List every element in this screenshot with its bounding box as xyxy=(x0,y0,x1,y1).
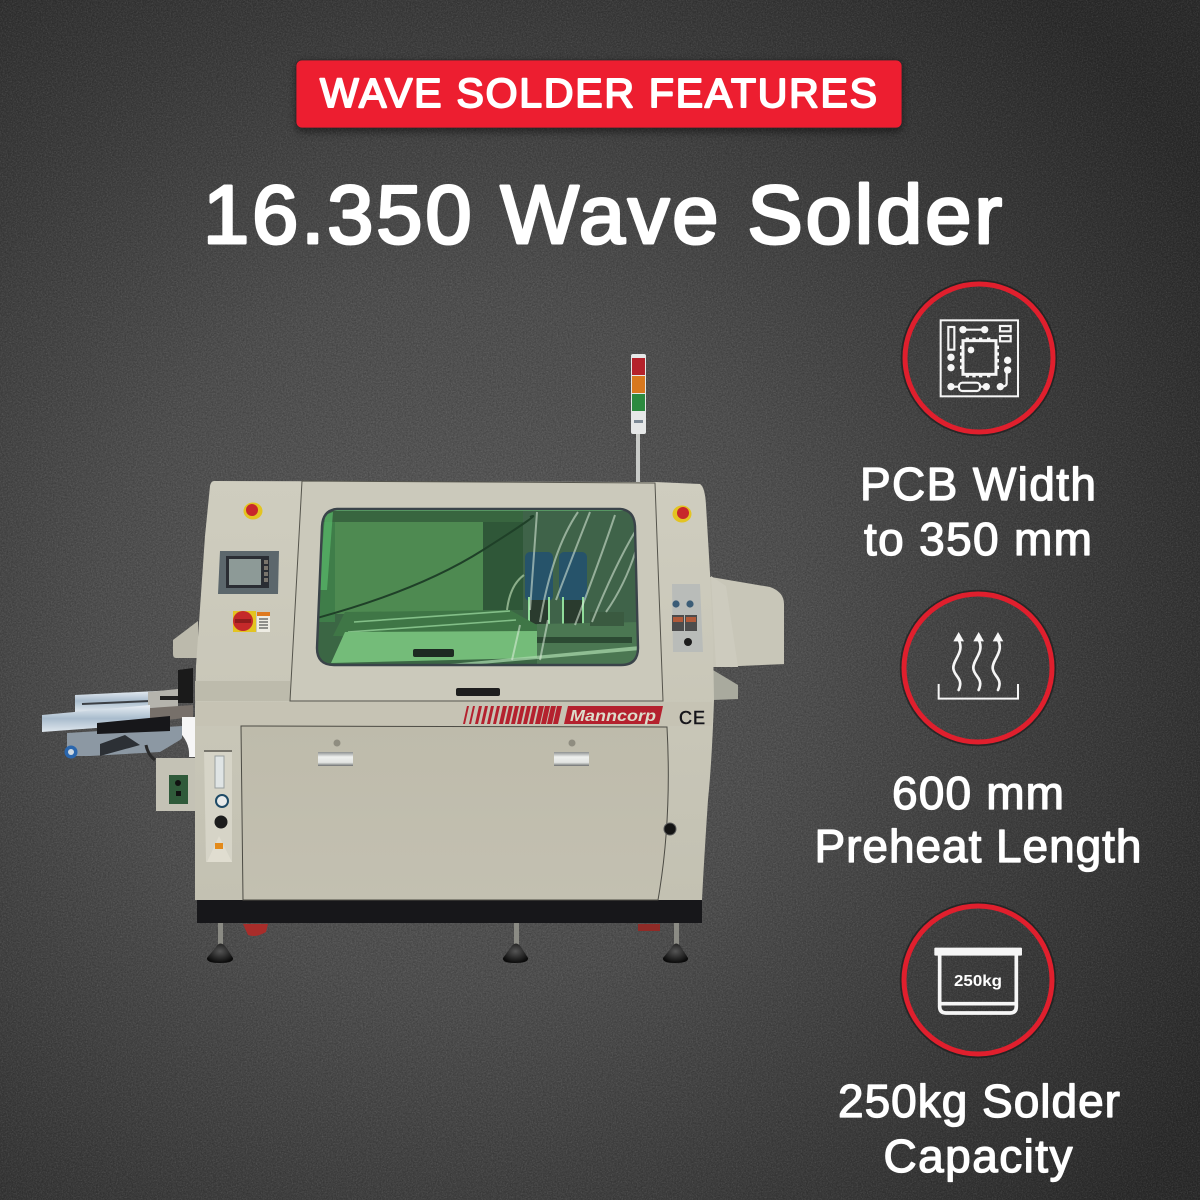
window with green glass xyxy=(317,509,640,665)
lower panel band xyxy=(196,702,712,726)
black base rail xyxy=(197,900,702,923)
machine: wave solder unit xyxy=(42,354,786,963)
icon: circuit board in red circle xyxy=(904,283,1054,433)
label: preheat length: Preheat Length xyxy=(814,820,1142,872)
label: PCB width: PCB Width xyxy=(860,458,1096,510)
right ledge xyxy=(713,670,738,700)
title: 16.350 Wave Solder xyxy=(203,168,1002,261)
label: preheat length: 600 mm xyxy=(892,767,1064,819)
stack light tower xyxy=(631,354,646,484)
door handle xyxy=(456,688,500,696)
label: solder capacity: Capacity xyxy=(884,1130,1072,1182)
window handle xyxy=(413,649,454,657)
label: solder capacity xyxy=(838,1075,1120,1182)
label: PCB width xyxy=(860,458,1096,565)
icon: solder pot in red circle: 250kg xyxy=(954,973,1002,990)
side shadow band xyxy=(195,681,290,701)
left flap xyxy=(173,621,198,658)
heading badge: wave solder features: WAVE SOLDER FEATURES xyxy=(320,70,877,116)
machine body shell xyxy=(195,481,714,900)
lower door xyxy=(241,726,668,900)
round key switch xyxy=(664,823,676,835)
manncorp logo band xyxy=(463,706,663,725)
emergency stop left xyxy=(244,502,262,520)
door pull handles xyxy=(318,740,589,766)
touch screen xyxy=(218,551,279,594)
feature: solder capacity xyxy=(838,905,1120,1182)
upper door frame xyxy=(290,481,663,701)
entry conveyor xyxy=(42,668,195,760)
icon: solder pot in red circle xyxy=(903,905,1053,1055)
heading badge: wave solder features xyxy=(296,60,902,132)
leveling feet xyxy=(207,923,688,963)
speed control box xyxy=(156,758,196,811)
red main switch xyxy=(233,611,270,632)
label: PCB width: to 350 mm xyxy=(864,513,1092,565)
feature: preheat length xyxy=(814,593,1142,872)
CE mark: CE xyxy=(679,708,706,728)
manncorp logo band: Manncorp xyxy=(570,708,656,725)
flow meter panel xyxy=(204,750,232,862)
casters xyxy=(243,924,660,936)
label: solder capacity: 250kg Solder xyxy=(838,1075,1120,1127)
feature: PCB width xyxy=(860,283,1096,565)
right exit hood xyxy=(705,576,786,667)
icon: rising heat in red circle xyxy=(903,593,1053,743)
emergency stop right xyxy=(672,506,692,522)
label: preheat length xyxy=(814,767,1142,872)
right control panel xyxy=(672,584,703,652)
